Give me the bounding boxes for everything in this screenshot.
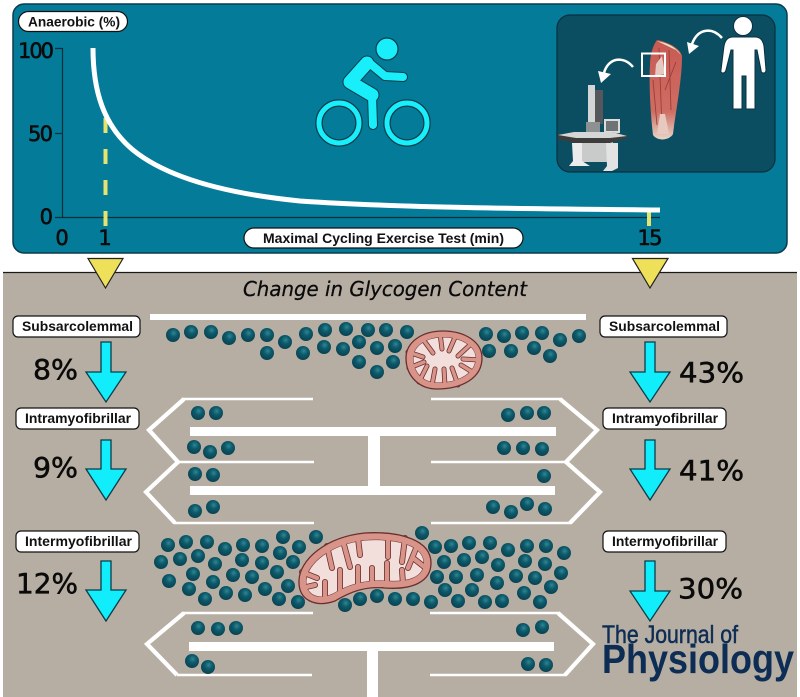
icon: electron microscope (558, 85, 627, 171)
arrow: subsarcolemmal right (630, 342, 670, 402)
mitochondrion: intermyofibrillar (299, 533, 431, 603)
sarcolemma line (150, 314, 586, 320)
pointer: 15 minutes (632, 258, 668, 288)
label: intramyofibrillar right: Intramyofibrillar (612, 410, 719, 426)
glycogen granules: intramyofibrillar lower (185, 620, 553, 674)
panel heading: Change in Glycogen Content (243, 277, 528, 301)
value: 41 percent: 41% (679, 454, 744, 487)
label: subsarcolemmal left: Subsarcolemmal (22, 318, 133, 334)
label: intramyofibrillar left: Intramyofibrillar (25, 410, 132, 426)
left column: 1 min results (13, 316, 140, 621)
label: intermyofibrillar right (603, 531, 726, 552)
value: 43 percent: 43% (679, 356, 744, 389)
arrow: intermyofibrillar left (86, 561, 126, 621)
marker at 15 min (647, 211, 651, 226)
panel: change in glycogen content (3, 272, 797, 697)
arrow: intermyofibrillar right (630, 561, 670, 621)
y axis title pill: Anaerobic (%) (28, 14, 120, 30)
anaerobic curve (93, 48, 660, 210)
x axis labels (55, 226, 662, 250)
journal logo: The Journal of (602, 621, 738, 649)
right column: 15 min results (600, 316, 744, 621)
x axis labels: 0 (55, 226, 69, 250)
arrow: subsarcolemmal left (86, 342, 126, 402)
glycogen granules: subsarcolemmal (166, 322, 586, 379)
dashed marker at 1 min (104, 118, 108, 227)
panel: biopsy and electron microscopy inset (557, 15, 775, 172)
pointer: 1 minute (88, 258, 123, 288)
arrow: person to muscle (687, 31, 722, 54)
arrow: intramyofibrillar left (86, 440, 126, 500)
label: intramyofibrillar right (603, 408, 726, 429)
label: intramyofibrillar left (16, 408, 139, 429)
icon: cyclist (319, 38, 427, 143)
y axis labels: 50 (28, 122, 53, 146)
myofibril structure: lower sarcomere (147, 613, 593, 697)
y axis labels (18, 39, 54, 229)
biopsy square (642, 54, 665, 76)
label: intermyofibrillar right: Intermyofibrillar (612, 533, 719, 549)
arrow: intramyofibrillar right (630, 440, 670, 500)
panel: anaerobic contribution chart (13, 4, 787, 253)
glycogen granules: intramyofibrillar upper (187, 406, 552, 519)
label: subsarcolemmal left (13, 316, 140, 337)
y axis title pill (18, 12, 128, 32)
icon: person (721, 16, 766, 109)
value: 8 percent: 8% (33, 353, 78, 386)
y axis labels: 0 (40, 205, 53, 229)
myofibril structure: upper sarcomeres (146, 399, 600, 523)
arrow: muscle to microscope (598, 60, 633, 83)
x axis title pill: Maximal Cycling Exercise Test (min) (263, 230, 504, 246)
value: 12 percent: 12% (16, 567, 78, 600)
x axis title pill (244, 228, 523, 248)
chart axes (55, 48, 660, 218)
label: intermyofibrillar left: Intermyofibrillar (25, 533, 133, 549)
label: intermyofibrillar left (16, 531, 139, 552)
label: subsarcolemmal right (600, 316, 727, 337)
value: 30 percent: 30% (678, 572, 743, 605)
icon: thigh muscle (650, 40, 682, 139)
label: subsarcolemmal right: Subsarcolemmal (609, 318, 720, 334)
y axis labels: 100 (18, 39, 54, 63)
glycogen granules: intermyofibrillar (154, 526, 571, 612)
value: 9 percent: 9% (33, 451, 78, 484)
x axis labels: 15 (638, 226, 662, 250)
x axis labels: 1 (98, 226, 112, 250)
mitochondrion: subsarcolemmal (406, 331, 482, 389)
